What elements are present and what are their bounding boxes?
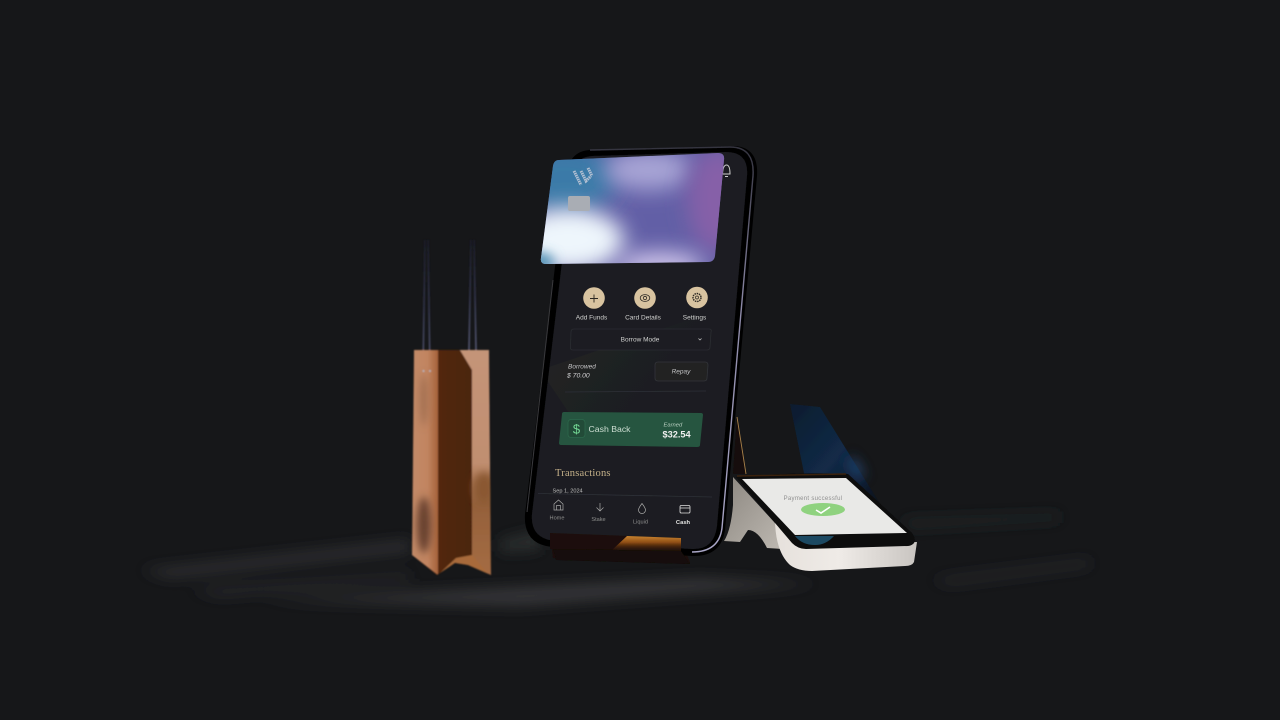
shopping bag [410, 240, 495, 578]
cash back tile: $32.54 [662, 430, 691, 440]
rod highlight [737, 417, 746, 474]
left frame highlight [527, 280, 553, 512]
nav: liquid: Liquid [633, 520, 648, 526]
borrowed amount: Borrowed [568, 364, 596, 370]
blue card under terminal [795, 536, 834, 545]
action: add funds [576, 287, 608, 322]
repay button [655, 362, 708, 381]
action: add funds: Add Funds [576, 314, 608, 322]
nav: home: Home [550, 516, 564, 522]
transactions heading: Transactions [555, 468, 611, 479]
bell icon [722, 165, 730, 176]
card chip [568, 196, 590, 211]
borrowed amount [567, 364, 596, 378]
nav: stake [592, 503, 606, 521]
terminal base [775, 522, 917, 571]
phone [520, 140, 760, 560]
cash back tile: Cash Back [588, 424, 631, 434]
terminal bezel [736, 473, 915, 549]
borrow mode dropdown: Borrow Mode [621, 336, 660, 344]
floor light streaks [140, 514, 1090, 606]
nav: stake: Stake [591, 517, 606, 523]
nav: home [550, 500, 564, 522]
dollar icon [568, 420, 585, 438]
payment terminal [724, 473, 917, 571]
nav: liquid [633, 504, 648, 526]
nav: cash [676, 506, 691, 526]
repay button: Repay [672, 368, 691, 376]
borrowed amount: $ 70.00 [566, 372, 590, 380]
terminal brown rim [737, 474, 846, 476]
terminal screen [742, 478, 907, 535]
action: card details: Card Details [625, 314, 662, 322]
phone screen [532, 152, 748, 549]
action: settings: Settings [683, 314, 707, 322]
main scene [410, 140, 917, 578]
success check badge [801, 503, 845, 516]
borrow mode dropdown [570, 329, 711, 350]
cash back tile [559, 412, 703, 447]
tapped bank card [790, 404, 882, 507]
card logo [574, 168, 592, 185]
action: settings [683, 287, 708, 322]
bag body [410, 348, 495, 578]
handle eyelets [422, 370, 431, 372]
nav: cash: Cash [676, 520, 691, 526]
phone holder clip [550, 533, 690, 564]
transaction date: Sep 1, 2024 [552, 488, 583, 494]
cash back tile: Earned [664, 422, 683, 428]
cash back tile: $ [573, 422, 581, 436]
credit card [540, 153, 724, 264]
payment status text: Payment successful [784, 496, 842, 502]
terminal stand [724, 477, 782, 549]
phone stand shadow base [550, 533, 690, 563]
terminal stand rod [733, 417, 746, 474]
action: card details [625, 287, 662, 322]
phone frame [525, 146, 757, 556]
bag handles [423, 240, 476, 372]
frame edge highlight [590, 147, 753, 552]
